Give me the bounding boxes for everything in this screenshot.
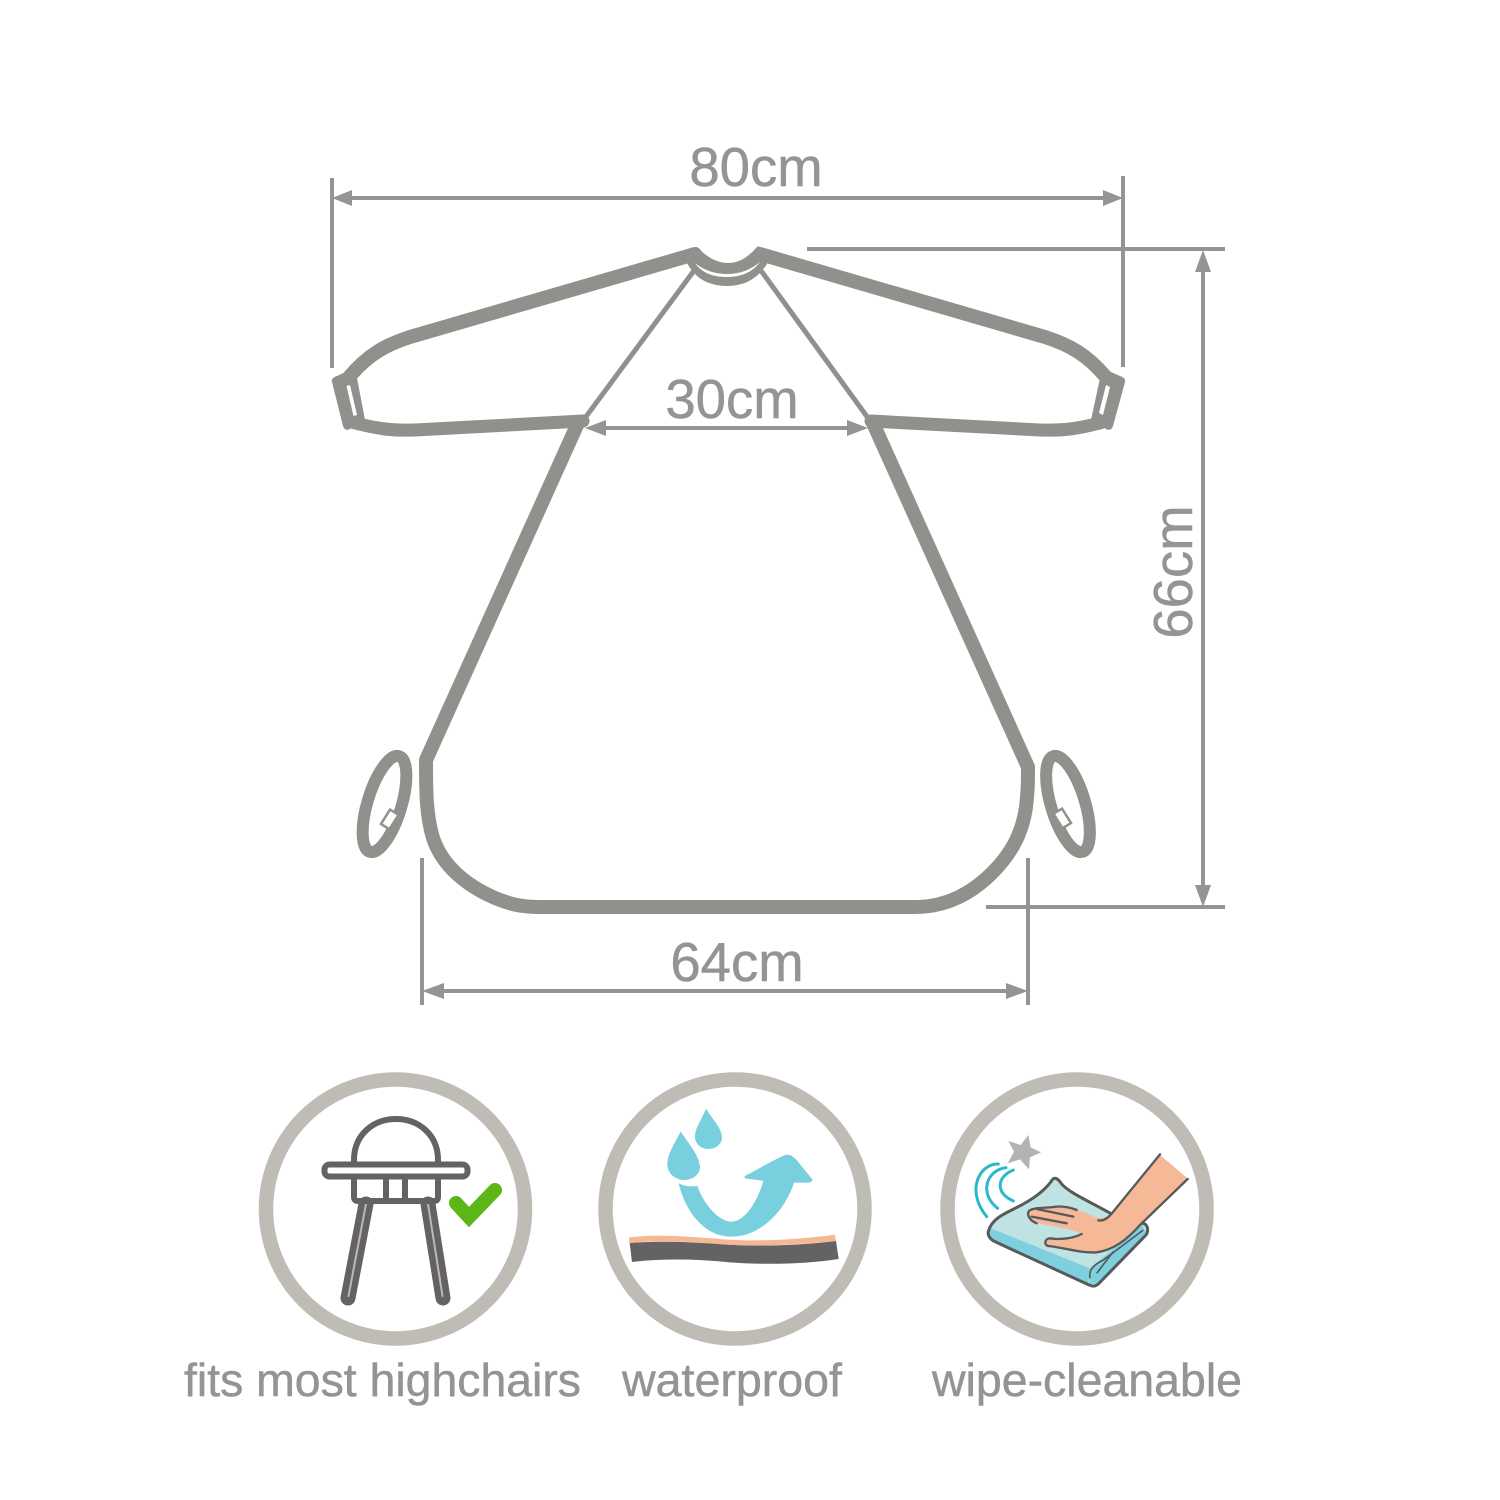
- right sleeve upper edge: [760, 254, 1105, 376]
- label: fits most highchairs: fits most highchairs: [184, 1354, 581, 1406]
- fabric dark layer: [630, 1241, 839, 1264]
- left sleeve lower edge: [355, 421, 583, 430]
- left loop: [354, 751, 415, 857]
- star: [1008, 1135, 1041, 1169]
- hand and arm: [1028, 1155, 1188, 1252]
- garment: bib outline: [350, 254, 1105, 907]
- right raglan seam: [762, 272, 868, 418]
- motion arcs: [976, 1164, 1013, 1217]
- badge ring: [948, 1080, 1206, 1338]
- dimension: 66cm height: [807, 249, 1225, 907]
- dimension: 80cm width: [332, 137, 1123, 368]
- icon: wipe clean: [948, 1080, 1206, 1338]
- badge ring: [266, 1080, 525, 1338]
- dimension: 64cm bottom: 64cm: [670, 932, 804, 993]
- bib body edge: [426, 423, 1028, 907]
- collar highlight: [695, 262, 760, 277]
- bounce arrow: [679, 1155, 812, 1237]
- towel: [988, 1178, 1148, 1286]
- chair dome: [354, 1119, 438, 1164]
- left cuff: [332, 369, 365, 430]
- icon: waterproof: [606, 1080, 864, 1338]
- dimension: 30cm chest: [585, 369, 868, 436]
- label: waterproof: waterproof: [621, 1354, 842, 1406]
- chair seat: [354, 1178, 438, 1201]
- right sleeve lower edge: [871, 421, 1100, 430]
- small drop: [695, 1109, 722, 1149]
- label: wipe-cleanable: wipe-cleanable: [931, 1354, 1242, 1406]
- left loop tab: [381, 810, 398, 829]
- towel lower fold: [989, 1225, 1147, 1284]
- right loop: [1037, 751, 1099, 857]
- dimension: 64cm bottom: [422, 858, 1028, 1005]
- right loop tab: [1054, 809, 1071, 828]
- left sleeve upper edge: [350, 254, 695, 376]
- right cuff: [1091, 369, 1125, 430]
- icon: highchair: [266, 1080, 525, 1338]
- hand outline: [1028, 1154, 1188, 1252]
- chair legs: [348, 1204, 443, 1298]
- dimension: 30cm chest: 30cm: [665, 369, 799, 430]
- dimension: 80cm width: 80cm: [689, 137, 823, 198]
- towel outline: [988, 1178, 1148, 1286]
- garment: collar: [687, 246, 767, 286]
- towel fold lines: [1090, 1230, 1143, 1278]
- dimension: 66cm height: 66cm: [1143, 505, 1204, 639]
- check mark: [456, 1190, 495, 1217]
- fabric peach layer: [629, 1235, 836, 1245]
- chair tray: [324, 1164, 468, 1176]
- left raglan seam: [585, 272, 693, 418]
- badge ring: [606, 1080, 864, 1338]
- large drop: [667, 1131, 700, 1180]
